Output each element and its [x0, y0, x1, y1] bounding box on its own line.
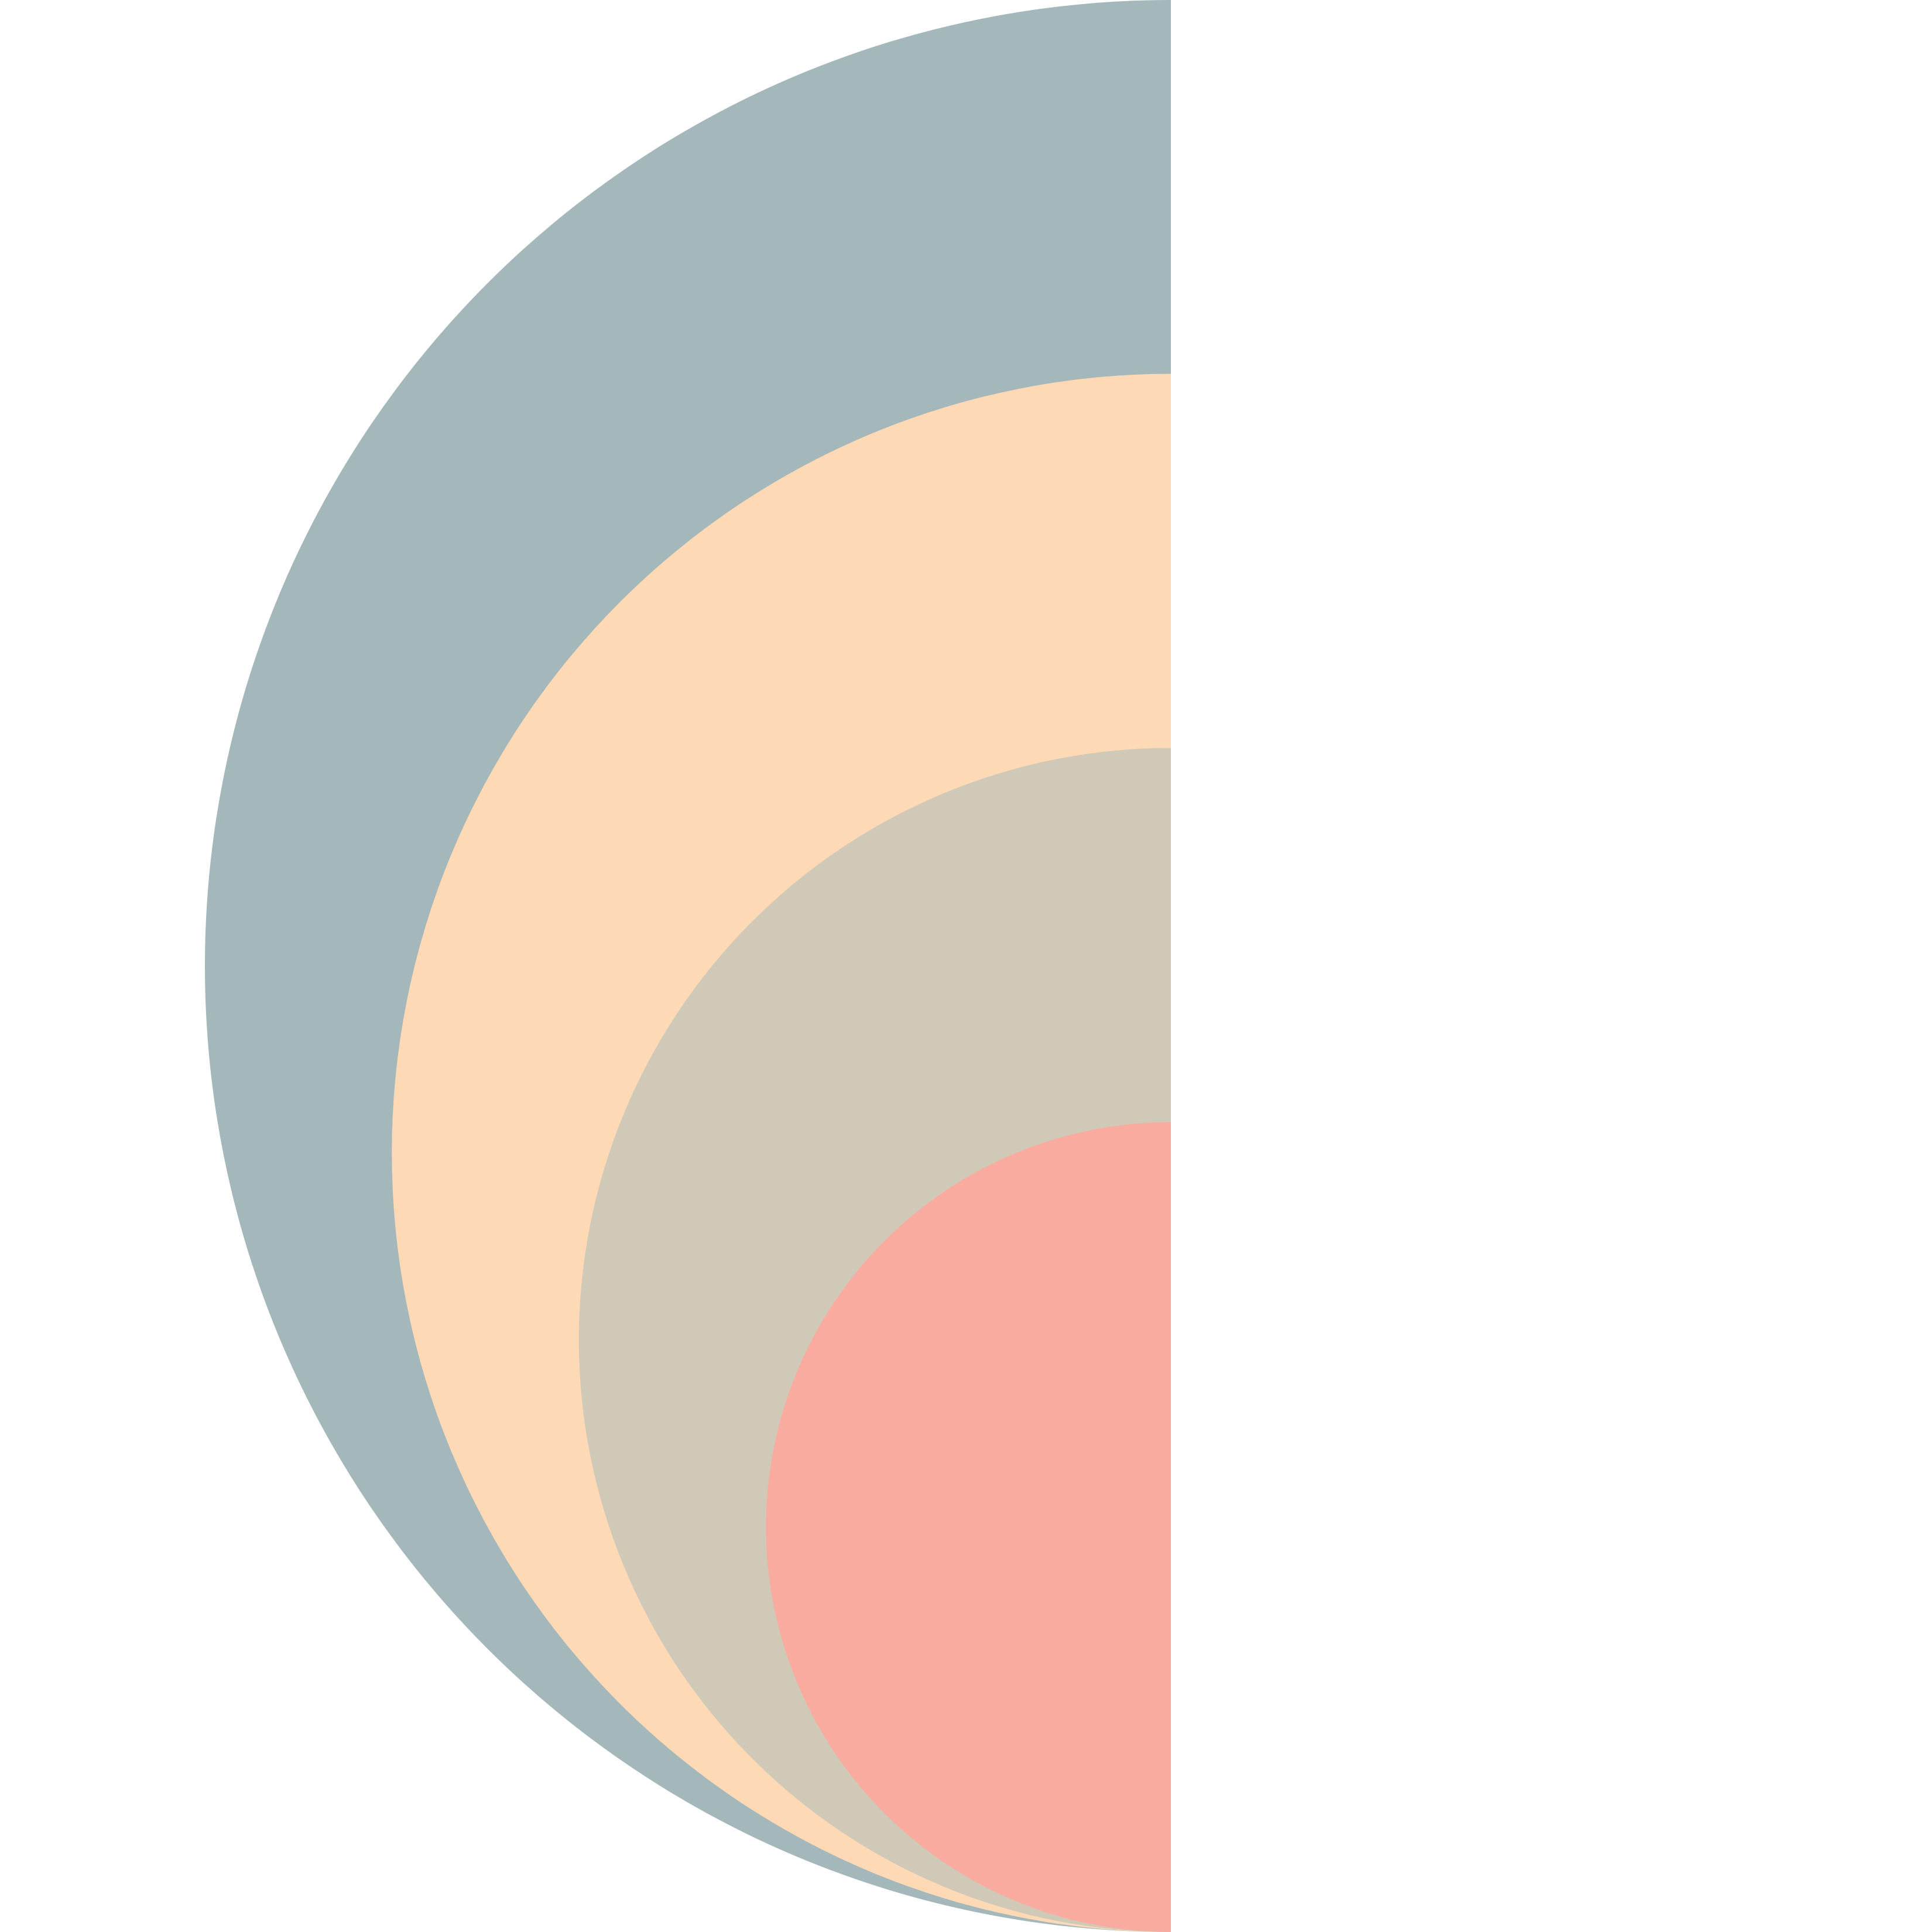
semicircle: tan	[579, 748, 1171, 1932]
semicircle: outer blue-grey	[205, 0, 1171, 1932]
semicircle: peach	[392, 374, 1171, 1932]
semicircle: inner coral	[766, 1122, 1171, 1932]
